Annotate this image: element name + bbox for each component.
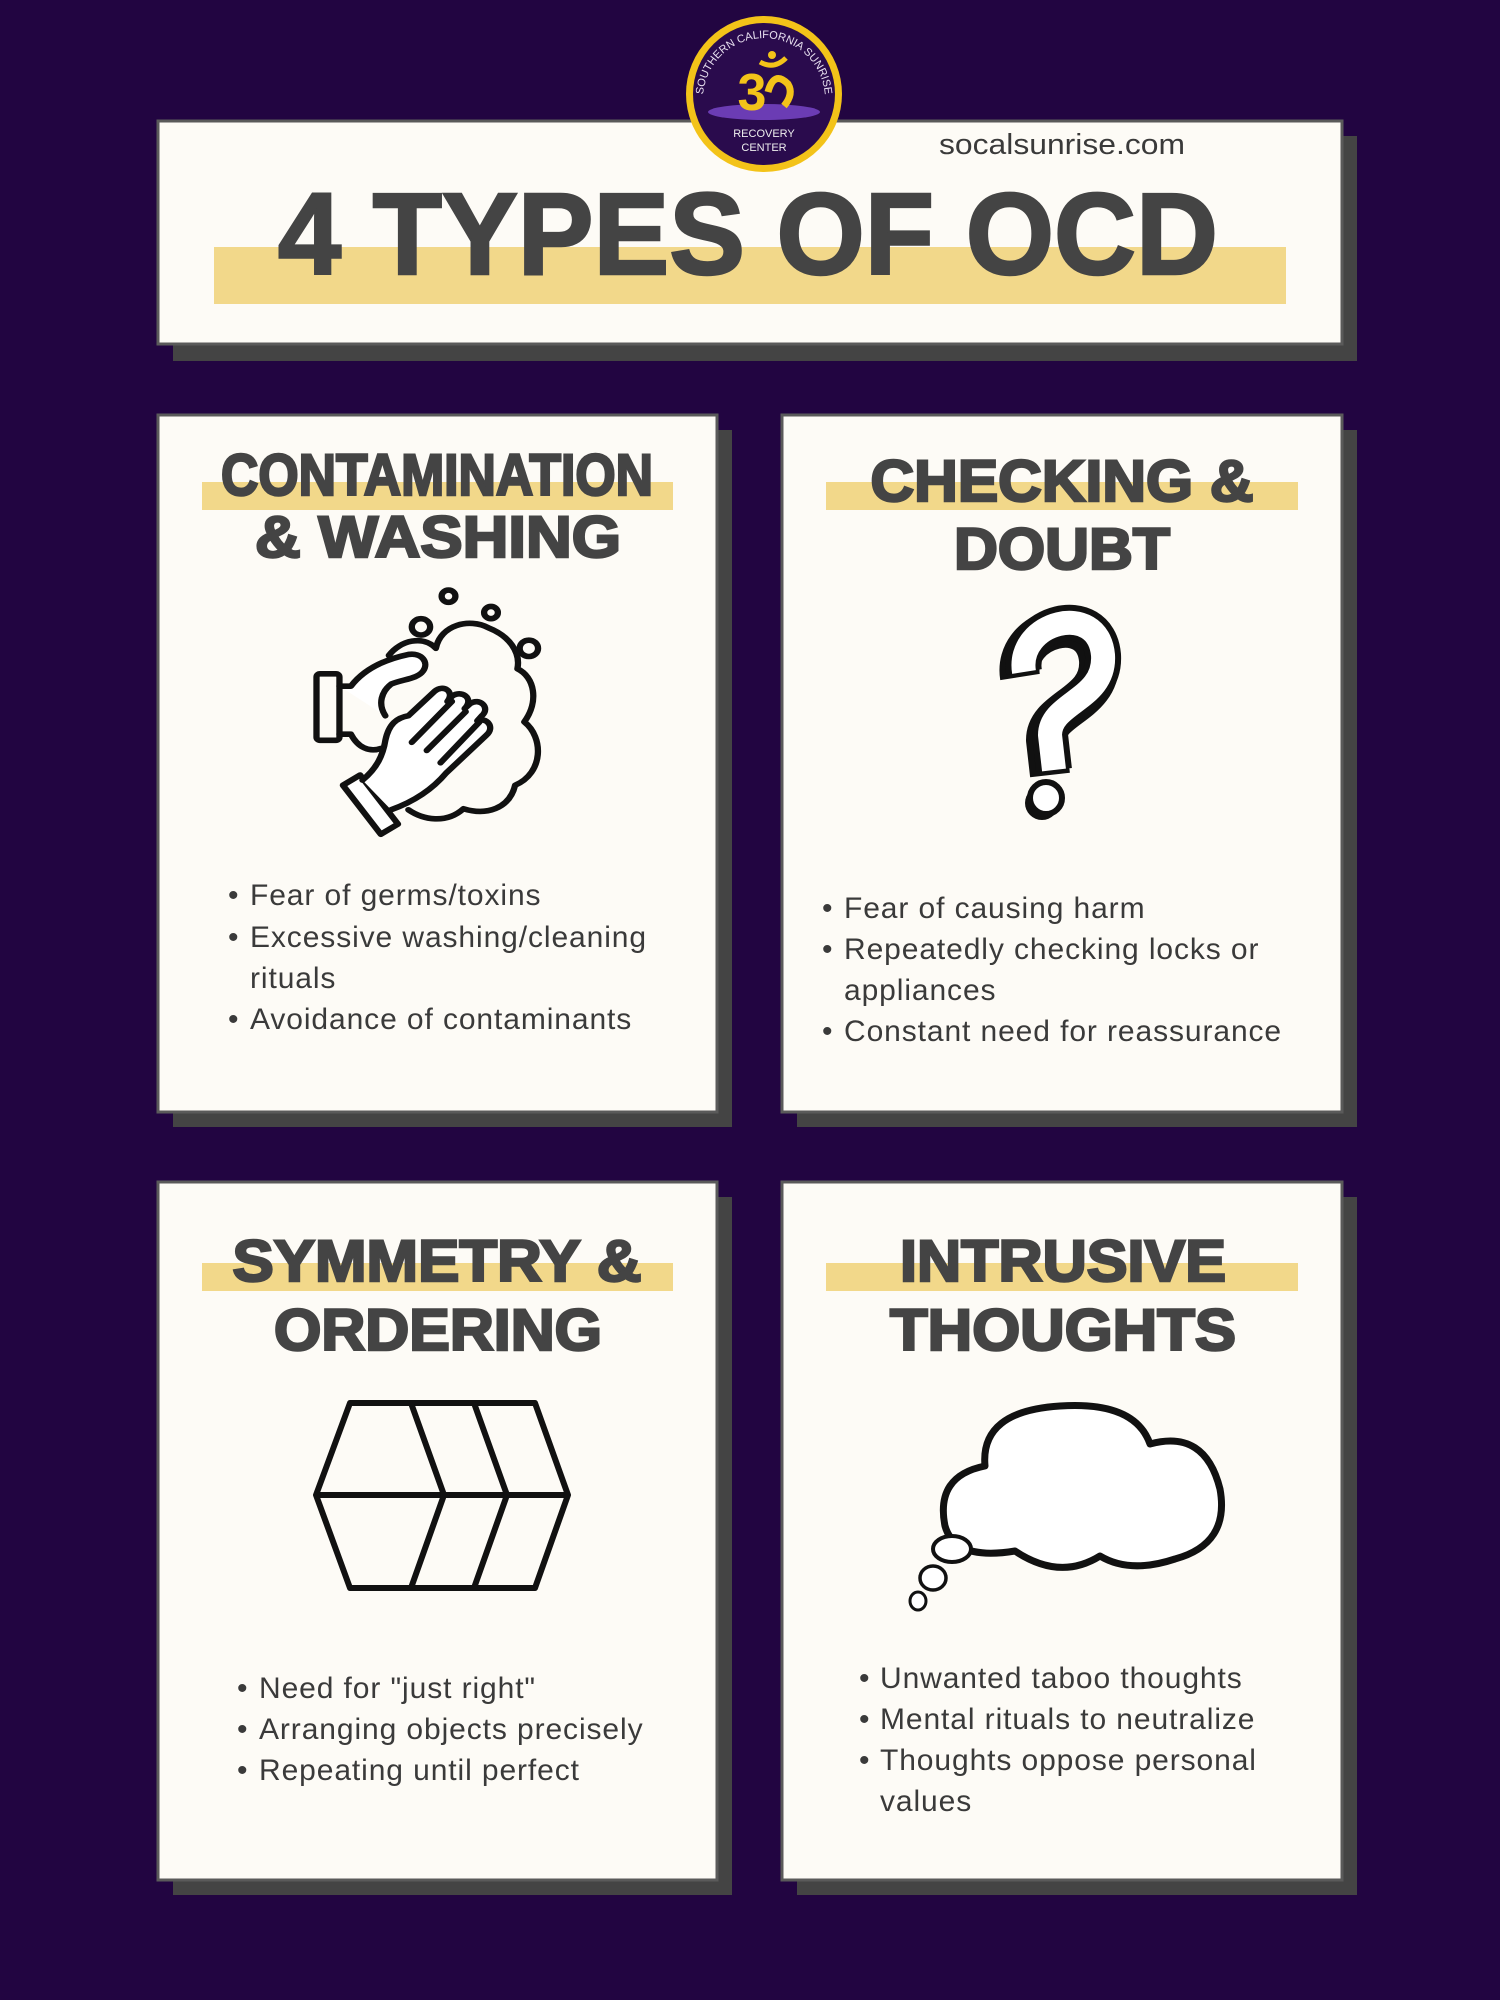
bullet list: • (822, 892, 833, 925)
bullet list (822, 892, 1282, 1048)
panel: checking & doubt (782, 415, 1357, 1127)
bullet list: • (237, 1672, 248, 1705)
bullet list: Unwanted taboo thoughts (880, 1662, 1243, 1695)
bullet list: • (237, 1713, 248, 1746)
title: 4 TYPES OF OCD (278, 169, 1218, 299)
bullet list: rituals (250, 962, 336, 995)
bullet list: values (880, 1785, 972, 1818)
heading highlight (202, 1263, 673, 1291)
icon: ordered box (316, 1403, 568, 1588)
heading: DOUBT (954, 517, 1170, 582)
bullet list: • (822, 933, 833, 966)
bullet list: • (228, 879, 239, 912)
bullet list: Need for "just right" (259, 1672, 536, 1705)
bullet list: • (228, 1003, 239, 1036)
bullet list: • (859, 1703, 870, 1736)
heading: CHECKING & (870, 449, 1254, 514)
bullet list: Arranging objects precisely (259, 1713, 643, 1746)
heading highlight (826, 1263, 1298, 1291)
logo (686, 16, 842, 172)
logo: SOUTHERN CALIFORNIA SUNRISE (696, 30, 832, 94)
bullet list: • (859, 1744, 870, 1777)
bullet list: Thoughts oppose personal (880, 1744, 1257, 1777)
heading (870, 449, 1254, 582)
heading: ORDERING (274, 1298, 602, 1363)
panel: contamination & washing (158, 415, 732, 1127)
bullet list: appliances (844, 974, 996, 1007)
heading highlight (826, 482, 1298, 510)
panel: intrusive thoughts (782, 1182, 1357, 1895)
icon: question mark (1019, 623, 1103, 820)
title highlight bar (214, 247, 1286, 304)
heading: THOUGHTS (890, 1298, 1236, 1363)
heading (221, 443, 653, 570)
bullet list (237, 1672, 643, 1787)
bullet list: • (237, 1754, 248, 1787)
bullet list: Constant need for reassurance (844, 1015, 1282, 1048)
bullet list: Fear of germs/toxins (250, 879, 541, 912)
bullet list: • (228, 921, 239, 954)
heading (232, 1229, 642, 1363)
bullet list: Avoidance of contaminants (250, 1003, 632, 1036)
bullet list: Excessive washing/cleaning (250, 921, 647, 954)
heading highlight (202, 482, 673, 510)
bullet list (228, 879, 647, 1036)
heading (890, 1229, 1236, 1363)
heading: & WASHING (255, 505, 621, 570)
bullet list: • (859, 1662, 870, 1695)
bullet list: Mental rituals to neutralize (880, 1703, 1255, 1736)
bullet list: Repeating until perfect (259, 1754, 580, 1787)
logo: 3 (738, 64, 766, 122)
logo: CENTER (741, 142, 787, 154)
heading: CONTAMINATION (221, 443, 653, 508)
website url: socalsunrise.com (939, 129, 1185, 161)
bullet list: • (822, 1015, 833, 1048)
logo: RECOVERY (733, 128, 795, 140)
heading: INTRUSIVE (900, 1229, 1226, 1294)
bullet list: Fear of causing harm (844, 892, 1145, 925)
header panel (158, 121, 1357, 361)
icon: hand washing (316, 590, 538, 834)
bullet list (859, 1662, 1257, 1818)
panel: symmetry & ordering (158, 1182, 732, 1895)
bullet list: Repeatedly checking locks or (844, 933, 1259, 966)
heading: SYMMETRY & (232, 1229, 642, 1294)
icon: thought cloud (910, 1405, 1222, 1610)
